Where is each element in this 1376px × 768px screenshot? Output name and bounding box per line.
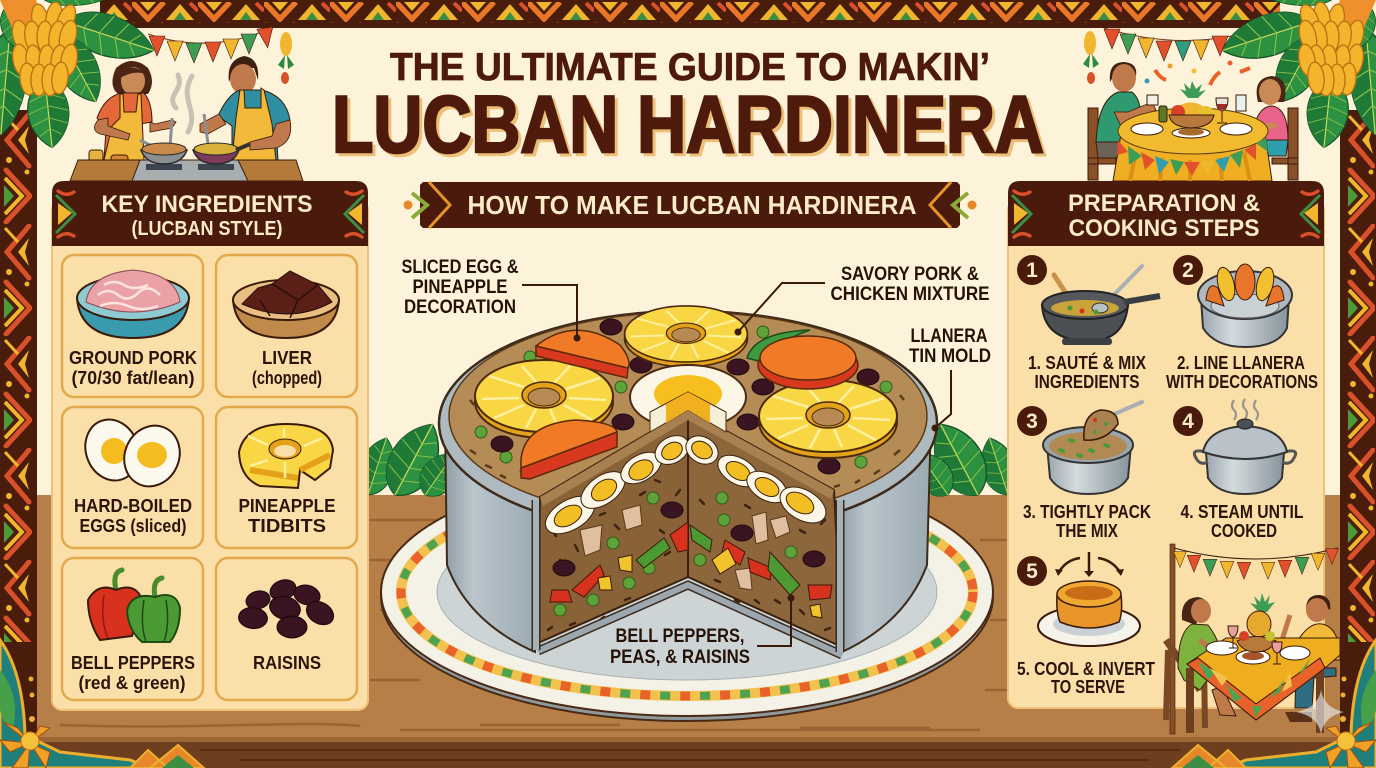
party bunting xyxy=(1174,548,1338,559)
fruit basket xyxy=(1170,102,1212,120)
card: pineapple: TIDBITS xyxy=(248,516,326,536)
decorative border: right xyxy=(1340,110,1376,768)
pans xyxy=(141,148,187,164)
step 2: WITH DECORATIONS xyxy=(1166,372,1318,392)
tablecloth xyxy=(1187,638,1340,720)
main illustration: sliced hardinera in llanera tin xyxy=(381,306,993,721)
callout: sliced egg and pineapple decoration: PINEAPPLE xyxy=(412,277,508,298)
callout: sliced egg and pineapple decoration xyxy=(402,257,580,342)
leaves behind cake xyxy=(352,414,1024,506)
watermark sparkle xyxy=(1296,690,1344,734)
step 5: TO SERVE xyxy=(1051,677,1125,697)
man cook xyxy=(200,56,291,160)
step 5 xyxy=(1017,552,1155,697)
card: bell peppers xyxy=(62,558,203,700)
panel header: (LUCBAN STYLE) xyxy=(132,218,282,240)
step 5: 5. COOL & INVERT xyxy=(1017,659,1155,679)
step 3: THE MIX xyxy=(1056,521,1118,541)
card: eggs xyxy=(62,407,203,548)
card: liver: LIVER xyxy=(262,348,312,368)
step 2: 2 xyxy=(1182,259,1194,282)
card: ground pork: GROUND PORK xyxy=(69,348,197,368)
title xyxy=(332,46,1044,170)
step 4: COOKED xyxy=(1211,521,1277,541)
card: eggs: EGGS (sliced) xyxy=(80,516,186,536)
callout: bell peppers, peas and raisins: PEAS, & RAISINS xyxy=(610,647,750,668)
table legs xyxy=(1190,668,1320,733)
illustration: family dining at table xyxy=(1088,60,1298,181)
callout: savory pork and chicken mixture: SAVORY PORK & xyxy=(841,264,979,285)
card: pineapple xyxy=(216,407,357,548)
chairs xyxy=(1088,108,1298,180)
cake top xyxy=(449,312,927,520)
callout: llanera tin mold xyxy=(909,326,991,432)
egg on top xyxy=(630,365,746,429)
title line 1: THE ULTIMATE GUIDE TO MAKIN’ xyxy=(390,46,990,89)
step 1: INGREDIENTS xyxy=(1034,372,1140,392)
tin right wall xyxy=(838,420,931,652)
counter xyxy=(70,160,303,181)
card: ground pork: (70/30 fat/lean) xyxy=(72,368,194,388)
peas inside xyxy=(554,492,797,616)
callout: bell peppers, peas and raisins: BELL PEPPERS, xyxy=(616,626,744,647)
crumb texture xyxy=(548,480,830,630)
step 3: 3. TIGHTLY PACK xyxy=(1023,502,1151,522)
jars xyxy=(89,150,103,170)
wooden table xyxy=(0,495,1376,768)
step 3: 3 xyxy=(1026,410,1038,433)
tin rim xyxy=(439,311,937,535)
decorative border: left xyxy=(0,110,37,768)
seated woman xyxy=(1166,597,1236,728)
pineapple basket xyxy=(1250,593,1275,612)
card: liver: (chopped) xyxy=(252,368,322,388)
tin edges at cut xyxy=(538,585,842,655)
green pepper strip xyxy=(747,330,810,362)
top right palm leaves and bananas xyxy=(1216,0,1376,150)
step 4: 4. STEAM UNTIL xyxy=(1180,502,1304,522)
stove xyxy=(132,160,248,181)
sliced eggs inside xyxy=(539,430,832,541)
egg cut sides xyxy=(650,392,726,432)
bottom right corner ornament xyxy=(1172,640,1376,768)
peas on top xyxy=(475,326,892,468)
card: bell peppers: (red & green) xyxy=(78,673,186,693)
wine glass xyxy=(1216,98,1228,123)
step 2 xyxy=(1166,255,1318,392)
panel body xyxy=(52,200,368,710)
bunting: top left xyxy=(148,27,294,84)
step 1: 1 xyxy=(1026,259,1038,282)
card: eggs: HARD-BOILED xyxy=(74,496,192,516)
callout: sliced egg and pineapple decoration: SLICED EGG & xyxy=(402,257,519,278)
raisins inside xyxy=(553,502,825,576)
chicken chunks xyxy=(580,505,790,590)
cut face right xyxy=(688,410,842,647)
illustration: couple cooking xyxy=(70,56,303,181)
banner text: HOW TO MAKE LUCBAN HARDINERA xyxy=(468,190,917,220)
panel header: PREPARATION & xyxy=(1068,190,1260,217)
seated man xyxy=(1282,595,1340,722)
crust on cut xyxy=(540,410,834,506)
card: raisins: RAISINS xyxy=(253,653,321,673)
card: ground pork xyxy=(62,255,203,397)
person left xyxy=(1096,62,1158,158)
panel header: COOKING STEPS xyxy=(1068,215,1260,242)
card: pineapple: PINEAPPLE xyxy=(238,496,336,516)
wine glasses xyxy=(1228,626,1238,648)
callout: savory pork and chicken mixture xyxy=(734,264,990,336)
cut face left xyxy=(538,410,688,643)
peppers inside xyxy=(550,522,832,618)
callout: llanera tin mold: TIN MOLD xyxy=(909,346,991,367)
sliced carrot-orange garnish xyxy=(521,330,858,479)
title line 2: LUCBAN HARDINERA xyxy=(332,80,1044,170)
callout: llanera tin mold: LLANERA xyxy=(910,326,988,347)
step 4: 4 xyxy=(1182,410,1194,433)
bunting: top right xyxy=(1083,28,1232,84)
top left palm leaves and bananas xyxy=(0,0,160,150)
card: liver xyxy=(216,255,357,397)
woman cook xyxy=(94,61,176,160)
step 5: 5 xyxy=(1026,560,1038,583)
card: raisins xyxy=(216,558,357,700)
panel header xyxy=(1008,181,1324,246)
person right xyxy=(1236,76,1288,156)
banner: how to make xyxy=(404,182,976,228)
card: bell peppers: BELL PEPPERS xyxy=(71,653,195,673)
table xyxy=(1113,130,1272,181)
illustration: family feast under bunting xyxy=(1166,544,1340,734)
step 4 xyxy=(1173,399,1304,541)
callout: bell peppers, peas and raisins xyxy=(610,594,794,668)
step 1 xyxy=(1017,255,1160,392)
confetti xyxy=(1155,68,1250,85)
tin left wall xyxy=(445,420,538,652)
decorative border: top xyxy=(100,0,1280,28)
pineapple rings xyxy=(475,306,897,458)
plates and dish xyxy=(1206,641,1238,655)
party pole xyxy=(1170,544,1175,734)
step 2: 2. LINE LLANERA xyxy=(1177,353,1305,373)
callout: sliced egg and pineapple decoration: DECORATION xyxy=(404,297,516,318)
panel: key ingredients xyxy=(52,181,368,710)
raisins on top xyxy=(491,319,879,474)
plates xyxy=(1131,123,1163,135)
bottom left corner ornament xyxy=(0,640,204,768)
panel body xyxy=(1008,200,1324,708)
steam xyxy=(173,75,192,132)
panel header: KEY INGREDIENTS xyxy=(102,191,312,218)
panel: preparation and cooking steps xyxy=(1008,181,1324,708)
step 3 xyxy=(1017,402,1151,541)
plate xyxy=(381,468,993,721)
step 1: 1. SAUTÉ & MIX xyxy=(1028,352,1146,373)
callout: savory pork and chicken mixture: CHICKEN MIXTURE xyxy=(830,284,990,305)
panel header xyxy=(52,181,368,246)
